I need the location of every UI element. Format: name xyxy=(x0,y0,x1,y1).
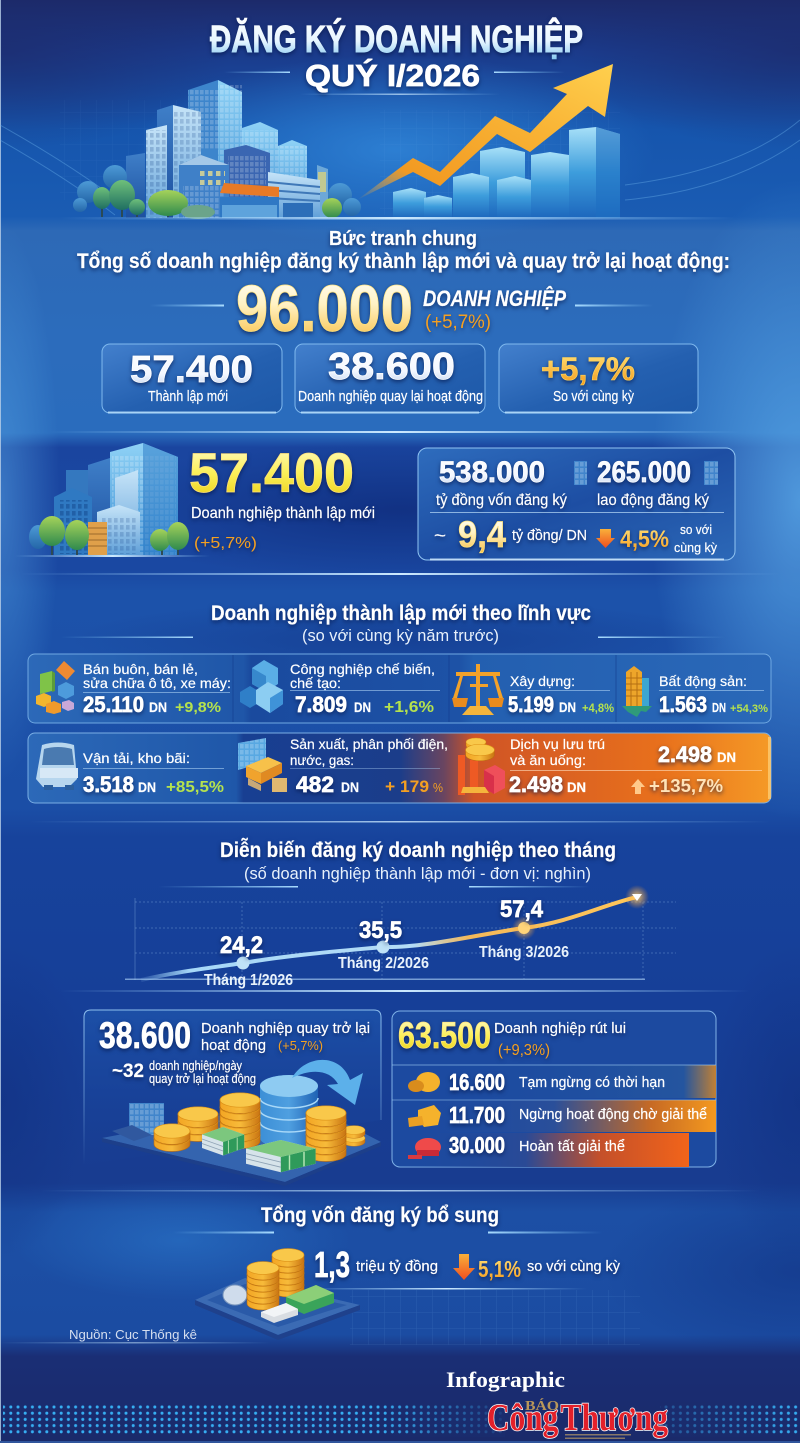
sector: transport: +85,5% xyxy=(166,779,224,796)
panel: capital and labour: 4,5% xyxy=(620,526,669,553)
panel: capital and labour: tỷ đồng/ DN xyxy=(512,527,587,544)
footer dots xyxy=(3,1402,798,1437)
footer branding: Infographic xyxy=(446,1367,565,1392)
sector: accommodation and food: +135,7% xyxy=(649,776,723,796)
panel: capital and labour: 9,4 xyxy=(458,514,506,555)
heading: monthly trend xyxy=(158,838,616,888)
data point: January: Tháng 1/2026 xyxy=(204,972,293,989)
icon: down arrow xyxy=(453,1254,475,1280)
sector: electricity, water, gas: % xyxy=(433,780,443,795)
heading: by sector xyxy=(61,602,725,645)
sector: wholesale and retail xyxy=(36,661,231,717)
skyline illustration xyxy=(73,80,361,219)
card: newly established: Thành lập mới xyxy=(148,388,228,405)
panel: capital and labour xyxy=(418,448,735,560)
card: year on year: +5,7% xyxy=(541,351,635,387)
card: returned to operation: Doanh nghiệp quay lại hoạt động xyxy=(298,388,483,405)
title xyxy=(210,17,583,93)
footer branding xyxy=(446,1367,668,1439)
panel: capital and labour: cùng kỳ xyxy=(674,540,717,555)
heading: additional capital: Tổng vốn đăng ký bổ sung xyxy=(261,1204,499,1227)
sector: real estate: +54,3% xyxy=(730,703,768,715)
card: year on year xyxy=(499,344,698,414)
panel: capital and labour: ~ xyxy=(434,526,446,545)
panel: withdrawn enterprises: (+9,3%) xyxy=(498,1042,550,1059)
sector: wholesale and retail: DN xyxy=(149,699,167,715)
bar chart with rising arrow xyxy=(357,64,620,218)
sector: accommodation and food: 2.498 xyxy=(658,742,712,767)
sector: transport: Vận tải, kho bãi: xyxy=(83,750,190,766)
panel: withdrawn enterprises: 63.500 xyxy=(398,1015,491,1056)
additional capital figures: triệu tỷ đồng xyxy=(356,1258,438,1275)
sector: manufacturing: +1,6% xyxy=(384,699,434,716)
card: newly established: 57.400 xyxy=(130,349,253,391)
sector: real estate: Bất động sản: xyxy=(659,673,747,689)
building illustration xyxy=(15,443,210,557)
row: awaiting dissolution: 11.700 xyxy=(449,1102,505,1128)
sector: manufacturing xyxy=(240,660,440,717)
sector: accommodation and food: DN xyxy=(567,779,586,795)
sector: wholesale and retail: 25.110 xyxy=(83,692,144,717)
sector: manufacturing: 7.809 xyxy=(295,692,347,717)
additional capital figures: 1,3 xyxy=(314,1244,350,1285)
heading: by sector: (so với cùng kỳ năm trước) xyxy=(302,626,499,645)
panel: capital and labour: tỷ đồng vốn đăng ký xyxy=(436,492,567,509)
illustration: coin stacks on tray xyxy=(195,1249,360,1340)
sector: electricity, water, gas: DN xyxy=(341,779,359,795)
sector: real estate xyxy=(622,666,768,717)
panel: returning enterprises: (+5,7%) xyxy=(278,1038,323,1053)
total 96.000: 96.000 xyxy=(236,271,413,345)
row: temporary suspension: Tạm ngừng có thời hạn xyxy=(519,1074,665,1091)
sector: wholesale and retail: sửa chữa ô tô, xe máy: xyxy=(83,675,231,691)
sector: construction xyxy=(452,664,614,717)
data point: February: 35,5 xyxy=(359,917,402,944)
sector: accommodation and food: Dịch vụ lưu trú xyxy=(510,736,605,752)
sector: manufacturing: Công nghiệp chế biến, xyxy=(290,661,435,677)
newspaper logo: BÁO xyxy=(525,1397,559,1414)
panel: returning enterprises: quay trở lại hoạt động xyxy=(149,1071,256,1086)
sector row 2 xyxy=(28,733,771,803)
sector: electricity, water, gas: nước, gas: xyxy=(290,752,354,768)
panel: returning enterprises: 38.600 xyxy=(99,1015,191,1056)
sector: wholesale and retail: Bán buôn, bán lẻ, xyxy=(83,661,198,677)
panel: capital and labour: 538.000 xyxy=(439,456,545,489)
heading: overall picture xyxy=(77,228,730,273)
heading: monthly trend: (số doanh nghiệp thành lập mới - đơn vị: nghìn) xyxy=(244,864,591,883)
sector: accommodation and food: và ăn uống: xyxy=(510,752,586,768)
row: temporary suspension: 16.600 xyxy=(449,1069,505,1095)
data point: January xyxy=(204,932,293,989)
sector: construction: 5.199 xyxy=(508,692,554,717)
source note: Nguồn: Cục Thống kê xyxy=(69,1327,197,1342)
additional capital figures: 5,1% xyxy=(478,1256,521,1282)
icon: down arrow xyxy=(596,529,615,548)
panel: capital and labour: 265.000 xyxy=(597,456,691,489)
summary cards xyxy=(102,344,698,414)
icon: curved arrow xyxy=(292,1060,363,1105)
sector: wholesale and retail: +9,8% xyxy=(175,699,221,716)
heading: overall picture: Bức tranh chung xyxy=(329,228,477,250)
data point: February xyxy=(338,917,429,972)
panel: returning enterprises: ~32 xyxy=(112,1061,144,1082)
card: returned to operation xyxy=(295,344,485,414)
panel: returning enterprises xyxy=(84,1010,381,1186)
card: returned to operation: 38.600 xyxy=(328,346,455,388)
panel: capital and labour: so với xyxy=(680,522,712,537)
sector: construction: +4,8% xyxy=(582,701,614,715)
title: ĐĂNG KÝ DOANH NGHIỆP xyxy=(210,17,583,61)
panel: returning enterprises: Doanh nghiệp quay trở lại xyxy=(201,1020,370,1037)
row: dissolved xyxy=(392,1132,689,1167)
sector: real estate: DN xyxy=(712,700,726,715)
panel: withdrawn enterprises xyxy=(392,1011,716,1167)
chart end marker xyxy=(625,885,649,909)
heading: by sector: Doanh nghiệp thành lập mới theo lĩnh vực xyxy=(211,602,591,625)
sector: construction: DN xyxy=(559,699,576,715)
additional capital figures: so với cùng kỳ xyxy=(527,1258,620,1275)
panel: capital and labour: lao động đăng ký xyxy=(597,492,709,509)
data point: February: Tháng 2/2026 xyxy=(338,955,429,972)
header xyxy=(60,17,735,220)
sector: manufacturing: chế tạo: xyxy=(290,675,341,691)
data point: March xyxy=(479,896,569,961)
sector row 1 xyxy=(28,654,771,723)
row: awaiting dissolution xyxy=(392,1100,716,1132)
row: awaiting dissolution: Ngừng hoạt động chờ giải thể xyxy=(519,1106,707,1123)
title: QUÝ I/2026 xyxy=(305,58,480,93)
big number xyxy=(189,441,375,552)
sector: electricity, water, gas: + 179 xyxy=(385,777,429,796)
sector: manufacturing: DN xyxy=(354,699,371,715)
newspaper logo: Công Thương xyxy=(487,1397,668,1439)
illustration: coins and data cylinder xyxy=(102,1060,381,1186)
total 96.000 xyxy=(150,271,653,345)
total 96.000: (+5,7%) xyxy=(425,312,491,333)
sector: accommodation and food: DN xyxy=(717,749,736,765)
sector: electricity, water, gas: 482 xyxy=(296,772,334,797)
sector: real estate: 1.563 xyxy=(659,692,707,717)
row: dissolved: Hoàn tất giải thể xyxy=(519,1138,625,1155)
sector: accommodation and food xyxy=(458,736,762,797)
row: temporary suspension xyxy=(392,1064,716,1098)
sector: construction: Xây dựng: xyxy=(510,673,575,689)
row: dissolved: 30.000 xyxy=(449,1132,505,1158)
data point: March: 57,4 xyxy=(500,896,544,923)
panel: returning enterprises: hoạt động xyxy=(201,1037,266,1054)
heading: overall picture: Tổng số doanh nghiệp đăng ký thành lập mới và quay trở lại hoạt động: xyxy=(77,250,730,273)
heading: monthly trend: Diễn biến đăng ký doanh nghiệp theo tháng xyxy=(220,838,616,862)
sector: transport xyxy=(36,742,224,797)
data point: January: 24,2 xyxy=(220,932,263,959)
sector: electricity, water, gas xyxy=(238,736,448,797)
sector: electricity, water, gas: Sản xuất, phân phối điện, xyxy=(290,736,448,752)
big number: Doanh nghiệp thành lập mới xyxy=(191,505,375,522)
panel: withdrawn enterprises: Doanh nghiệp rút lui xyxy=(494,1020,626,1037)
panel: returning enterprises: doanh nghiệp/ngày xyxy=(149,1058,242,1073)
sector: transport: 3.518 xyxy=(83,772,134,797)
card: year on year: So với cùng kỳ xyxy=(553,388,634,405)
additional capital figures xyxy=(306,1244,620,1290)
new enterprises block xyxy=(15,441,735,560)
big number: 57.400 xyxy=(189,441,354,504)
data point: March: Tháng 3/2026 xyxy=(479,944,569,961)
line chart xyxy=(125,885,676,989)
sector: transport: DN xyxy=(138,779,156,795)
total 96.000: DOANH NGHIỆP xyxy=(423,286,566,311)
card: newly established xyxy=(102,344,282,414)
sector: accommodation and food: 2.498 xyxy=(509,772,563,797)
big number: (+5,7%) xyxy=(194,535,257,552)
